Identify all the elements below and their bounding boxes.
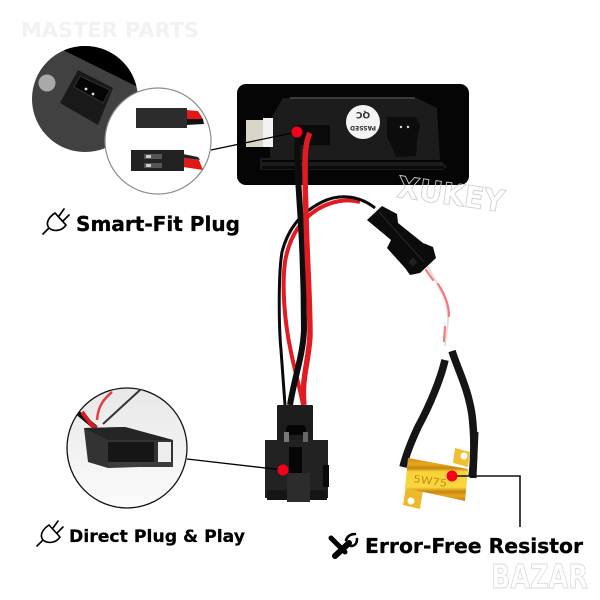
inline connector — [367, 206, 436, 275]
main connector — [265, 405, 329, 502]
main wires from plate to connector — [290, 133, 310, 405]
label: Smart-Fit Plug: Smart-Fit Plug — [76, 212, 240, 236]
label: Direct Plug & Play — [37, 521, 245, 547]
sticker: QC — [355, 109, 370, 119]
resistor sleeves — [403, 351, 474, 477]
sticker — [346, 105, 380, 139]
panel: housing close-up circle — [67, 388, 187, 508]
icon: plug — [43, 209, 69, 234]
red dot: main connector — [278, 464, 288, 476]
right socket — [387, 117, 420, 157]
label: Error-Free Resistor: Error-Free Resistor — [365, 534, 583, 558]
sticker: PASSED — [350, 124, 376, 131]
resistor: 5W75 — [413, 474, 448, 490]
watermark: MASTER PARTS: MASTER PARTS — [21, 18, 199, 42]
panel: pin connector close-up circle — [105, 88, 211, 194]
resistor lead wire: twisted pink and white — [426, 267, 449, 345]
arrow: resistor leader line — [452, 476, 520, 527]
red dot: resistor — [446, 470, 458, 482]
panel: licence plate light — [237, 84, 469, 185]
arrow: leader line to main connector — [187, 459, 283, 470]
sleeve end over resistor — [473, 432, 475, 478]
red dot: plate plug — [292, 126, 302, 138]
icon: plug — [37, 521, 63, 546]
panel: socket close-up circle — [30, 44, 140, 154]
label: Direct Plug & Play: Direct Plug & Play — [69, 527, 245, 547]
arrow: leader line to plate plug — [211, 132, 297, 150]
loop wire — [279, 197, 375, 405]
icon: wrench and screwdriver — [331, 534, 357, 556]
resistor — [403, 448, 470, 509]
watermark: XUKEY: XUKEY — [395, 170, 508, 220]
